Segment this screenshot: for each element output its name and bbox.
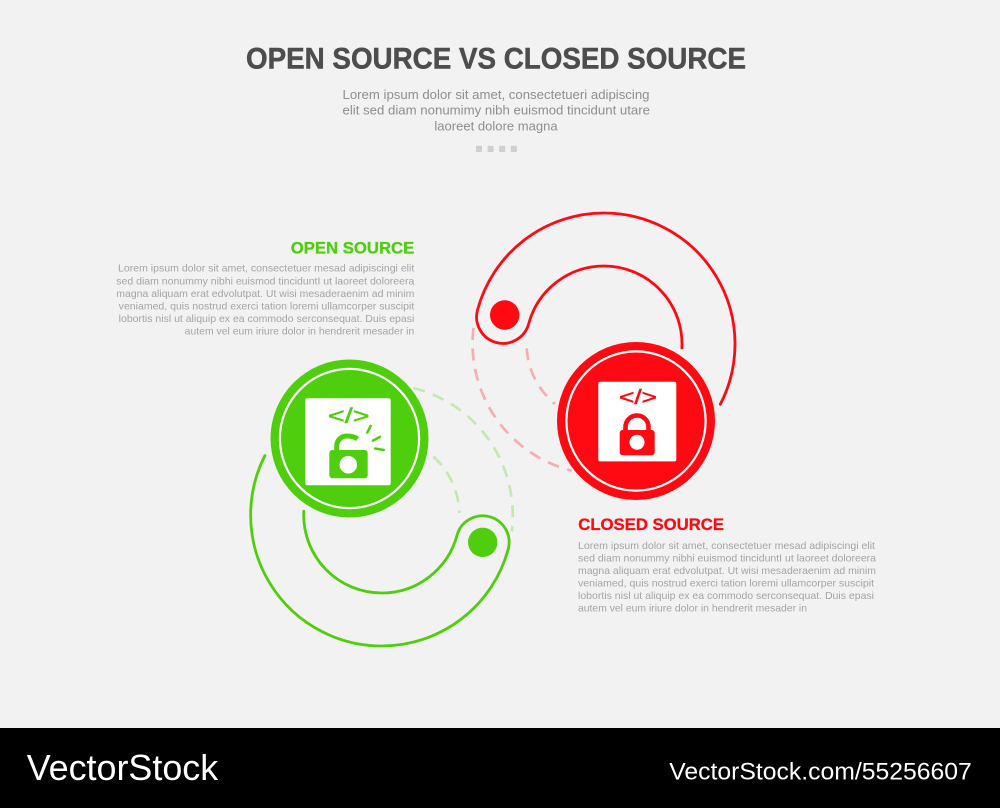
- closed source body text: lobortis nisl ut aliquip ex ea commodo serconsequat. Duis epasi: [578, 591, 874, 602]
- open source body text: Lorem ipsum dolor sit amet, consectetuer mesad adipiscingi elit: [118, 264, 414, 275]
- closed source badge: [557, 342, 715, 500]
- title: OPEN SOURCE VS CLOSED SOURCE: [246, 43, 746, 76]
- footer logo text: VectorStock: [27, 747, 219, 788]
- icon: code tag: </>: [619, 387, 657, 409]
- subtitle text block: [342, 88, 650, 133]
- icon: code tag: </>: [328, 405, 370, 428]
- panel: open source text: [116, 238, 415, 337]
- red dashed connector arcs: [473, 328, 572, 471]
- open source body text: magna aliquam erat edvolutpat. Ut wisi mesaderaenim ad minim: [116, 289, 414, 300]
- footer image id text: VectorStock.com/55256607: [669, 758, 972, 785]
- open source body text: veniamed, quis nostrud exerci tation loremi ullamcorper suscipit: [119, 301, 414, 312]
- footer bar: [0, 728, 1000, 808]
- closed source body text: Lorem ipsum dolor sit amet, consectetuer mesad adipiscingi elit: [578, 541, 875, 552]
- open source body text: [116, 264, 415, 337]
- subtitle text block: Lorem ipsum dolor sit amet, consectetueri adipiscing: [342, 88, 650, 102]
- open source heading: OPEN SOURCE: [291, 238, 414, 258]
- subtitle text block: elit sed diam nonumimy nibh euismod tincidunt utare: [342, 104, 650, 118]
- red dot: [490, 300, 519, 330]
- icon: closed padlock: [620, 416, 655, 455]
- subtitle text block: laoreet dolore magna: [434, 119, 558, 133]
- open source body text: lobortis nisl ut aliquip ex ea commodo serconsequat. Duis epasi: [119, 314, 414, 325]
- open source badge: [270, 360, 428, 518]
- green dashed connector arcs: [413, 388, 513, 532]
- decorative pagination squares: [476, 146, 517, 152]
- open source body text: sed diam nonummy nibhi euismod tinciduntI ut laoreet doloreera: [116, 276, 415, 287]
- closed source body text: magna aliquam erat edvolutpat. Ut wisi mesaderaenim ad minim: [578, 566, 876, 577]
- green hook outline arc: [251, 456, 509, 646]
- icon: open padlock: [329, 426, 384, 478]
- closed source body text: autem vel eum iriure dolor in hendrerit mesader in: [578, 604, 807, 615]
- closed source heading: CLOSED SOURCE: [578, 515, 724, 534]
- green dot: [468, 528, 497, 557]
- panel: closed source text: [578, 515, 876, 615]
- red hook outline arc: [477, 213, 735, 404]
- open source body text: autem vel eum iriure dolor in hendrerit mesader in: [185, 326, 415, 337]
- closed source body text: veniamed, quis nostrud exerci tation loremi ullamcorper suscipit: [578, 579, 874, 590]
- closed source body text: [578, 541, 876, 615]
- closed source body text: sed diam nonummy nibhi euismod tinciduntI ut laoreet doloreera: [578, 554, 876, 565]
